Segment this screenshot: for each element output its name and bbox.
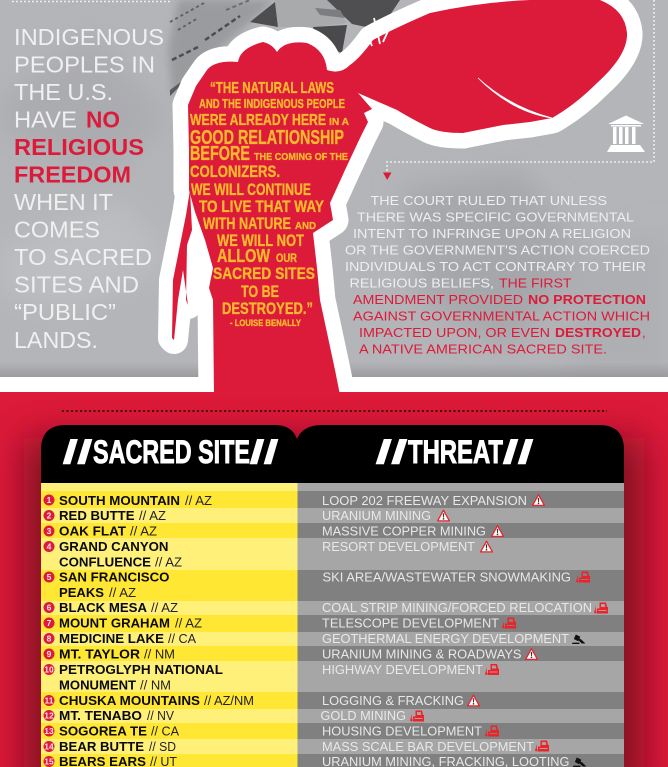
- column: sacred site names: 6: [47, 602, 52, 612]
- heading text: no religious freedom: SITES AND: [14, 272, 139, 298]
- sacred site heading: //: [250, 434, 278, 470]
- quote: GOOD RELATIONSHIP: [190, 127, 344, 149]
- threat heading: //: [376, 434, 407, 470]
- column: sacred site names: [44, 493, 254, 767]
- column: sacred site names: MONUMENT: [59, 678, 136, 692]
- column: sacred site names: // AZ/NM: [204, 693, 254, 708]
- heading text: no religious freedom: RELIGIOUS: [14, 134, 144, 160]
- column: sacred site names: GRAND CANYON: [59, 539, 168, 554]
- quote: BEFORE: [190, 143, 250, 165]
- court ruling text: IMPACTED UPON, OR EVEN: [359, 325, 550, 340]
- quote: TO BE: [241, 282, 279, 301]
- quote: DESTROYED.”: [222, 299, 313, 318]
- sacred site heading: //: [63, 434, 92, 470]
- court ruling text: DESTROYED: [555, 325, 641, 340]
- quote: COLONIZERS.: [190, 162, 280, 181]
- column: sacred site names: BEAR BUTTE: [59, 739, 144, 754]
- court ruling text: THERE WAS SPECIFIC GOVERNMENTAL: [357, 210, 634, 224]
- heading text: no religious freedom: HAVE: [14, 106, 77, 132]
- quote: ALLOW: [217, 245, 270, 266]
- column: sacred site names: // AZ: [185, 493, 212, 508]
- column: sacred site names: // AZ: [155, 554, 182, 570]
- panel: red background: [0, 392, 668, 767]
- column: sacred site names: MT. TAYLOR: [59, 647, 141, 662]
- heading text: no religious freedom: “PUBLIC”: [14, 299, 116, 325]
- court ruling text: THE FIRST: [499, 276, 572, 290]
- column: sacred site names: CHUSKA MOUNTAINS: [59, 693, 200, 708]
- column: sacred site names: 4: [47, 542, 52, 552]
- column: sacred site names: 7: [47, 618, 52, 628]
- heading text: no religious freedom: FREEDOM: [14, 162, 131, 188]
- column: threats: HIGHWAY DEVELOPMENT: [322, 662, 483, 677]
- column: threats: URANIUM MINING: [322, 508, 431, 523]
- court ruling text: THE COURT RULED THAT UNLESS: [370, 193, 607, 208]
- heading text: no religious freedom: PEOPLES IN: [14, 52, 155, 78]
- court ruling text: A NATIVE AMERICAN SACRED SITE.: [359, 342, 607, 356]
- column: sacred site names: // NV: [147, 708, 174, 723]
- icon: courthouse: [607, 116, 645, 152]
- column: threats: [320, 493, 608, 767]
- column: sacred site names: // AZ: [130, 524, 157, 538]
- column: sacred site names: MT. TENABO: [59, 708, 142, 723]
- heading text: no religious freedom: NO: [86, 106, 120, 132]
- column: sacred site names: 2: [47, 510, 52, 520]
- column: sacred site names: SOGOREA TE: [59, 724, 147, 739]
- panel: grey background: [0, 0, 668, 392]
- column: threats: GOLD MINING: [320, 708, 406, 723]
- quote: WE WILL CONTINUE: [191, 180, 311, 199]
- column: sacred site names: // AZ: [109, 585, 136, 600]
- quote: SACRED SITES: [213, 264, 315, 283]
- column: sacred site names: 15: [44, 756, 54, 766]
- column: sacred site names: 1: [47, 495, 52, 505]
- column: sacred site names: RED BUTTE: [59, 508, 135, 523]
- column: sacred site names: // CA: [151, 724, 179, 739]
- column: sacred site names: 14: [44, 742, 54, 752]
- column: sacred site names: MEDICINE LAKE: [59, 631, 164, 646]
- column: sacred site names: 5: [47, 572, 52, 582]
- table header: [41, 425, 624, 484]
- quote: IN A: [329, 117, 349, 128]
- heading text: no religious freedom: WHEN IT: [14, 189, 113, 215]
- column: threats: RESORT DEVELOPMENT: [322, 539, 475, 554]
- quote: WITH NATURE: [203, 214, 291, 233]
- threat heading: THREAT: [408, 434, 503, 470]
- heading text: no religious freedom: TO SACRED: [14, 244, 152, 270]
- sacred site heading: SACRED SITE: [93, 434, 250, 470]
- column: sacred site names: PETROGLYPH NATIONAL: [59, 662, 223, 677]
- court ruling text: OR THE GOVERNMENT'S ACTION COERCED: [345, 242, 650, 258]
- table rows background: [41, 483, 624, 767]
- quote: THE COMING OF THE: [254, 151, 348, 163]
- column: sacred site names: BLACK MESA: [59, 600, 148, 615]
- court ruling text: ,: [642, 325, 646, 340]
- column: sacred site names: SOUTH MOUNTAIN: [59, 493, 180, 508]
- column: threats: HOUSING DEVELOPMENT: [322, 724, 482, 739]
- column: threats: MASSIVE COPPER MINING: [322, 524, 486, 538]
- column: sacred site names: CONFLUENCE: [59, 554, 151, 570]
- column: threats: COAL STRIP MINING/FORCED RELOCATION: [322, 600, 592, 615]
- quote: [190, 80, 349, 328]
- column: threats: URANIUM MINING & ROADWAYS: [322, 647, 522, 662]
- column: sacred site names: 10: [44, 664, 54, 674]
- column: sacred site names: // NM: [140, 678, 171, 692]
- white strip: [0, 377, 668, 392]
- court ruling text: [345, 193, 650, 356]
- column: threats: MASS SCALE BAR DEVELOPMENT: [322, 739, 534, 754]
- column: sacred site names: // CA: [168, 631, 196, 646]
- column: sacred site names: // AZ: [139, 508, 166, 523]
- court ruling text: NO PROTECTION: [528, 292, 646, 307]
- quote: WE WILL NOT: [217, 231, 304, 250]
- heading text: no religious freedom: THE U.S.: [14, 79, 113, 105]
- column: sacred site names: MOUNT GRAHAM: [59, 616, 170, 631]
- threat heading: //: [503, 434, 533, 470]
- column: sacred site names: 3: [47, 526, 52, 536]
- column: sacred site names: 11: [44, 696, 54, 706]
- column: sacred site names: OAK FLAT: [59, 524, 126, 538]
- heading text: no religious freedom: INDIGENOUS: [14, 24, 164, 50]
- court ruling text: RELIGIOUS BELIEFS,: [350, 276, 494, 290]
- court ruling text: INDIVIDUALS TO ACT CONTRARY TO THEIR: [345, 259, 646, 274]
- column: sacred site names: 13: [44, 726, 54, 736]
- dark torn texture behind the fist: [168, 0, 400, 96]
- column: sacred site names: // AZ: [151, 600, 178, 615]
- quote: “THE NATURAL LAWS: [210, 80, 334, 97]
- column: sacred site names: // NM: [144, 647, 175, 662]
- quote: AND: [295, 221, 316, 232]
- quote: - LOUISE BENALLY: [230, 318, 301, 328]
- column: sacred site names: SAN FRANCISCO: [59, 570, 170, 584]
- dotted connector with arrow: [12, 0, 654, 180]
- quote: AND THE INDIGENOUS PEOPLE: [199, 97, 345, 111]
- column: sacred site names: 12: [44, 710, 54, 720]
- heading text: no religious freedom: COMES: [14, 216, 100, 242]
- heading text: no religious freedom: LANDS.: [14, 327, 98, 353]
- column: sacred site names: 9: [47, 649, 52, 659]
- column: threats: GEOTHERMAL ENERGY DEVELOPMENT: [322, 631, 569, 646]
- quote: WERE ALREADY HERE: [190, 112, 326, 129]
- column: sacred site names: // SD: [149, 739, 176, 754]
- column: sacred site names: // AZ: [175, 616, 202, 631]
- quote: OUR: [276, 253, 298, 265]
- dotted divider: [62, 410, 607, 412]
- column: threats: TELESCOPE DEVELOPMENT: [322, 616, 499, 631]
- court ruling text: AGAINST GOVERNMENTAL ACTION WHICH: [353, 308, 650, 324]
- column: threats: LOOP 202 FREEWAY EXPANSION: [322, 493, 527, 508]
- quote: TO LIVE THAT WAY: [199, 197, 325, 216]
- column: sacred site names: PEAKS: [59, 585, 104, 600]
- column: threats: SKI AREA/WASTEWATER SNOWMAKING: [322, 570, 571, 584]
- fist and feather illustration: [172, 0, 627, 395]
- heading text: no religious freedom: [14, 24, 164, 353]
- court ruling text: INTENT TO INFRINGE UPON A RELIGION: [353, 226, 631, 241]
- column: threats: LOGGING & FRACKING: [322, 693, 464, 708]
- column: sacred site names: 8: [47, 634, 52, 644]
- court ruling text: AMENDMENT PROVIDED: [353, 292, 523, 307]
